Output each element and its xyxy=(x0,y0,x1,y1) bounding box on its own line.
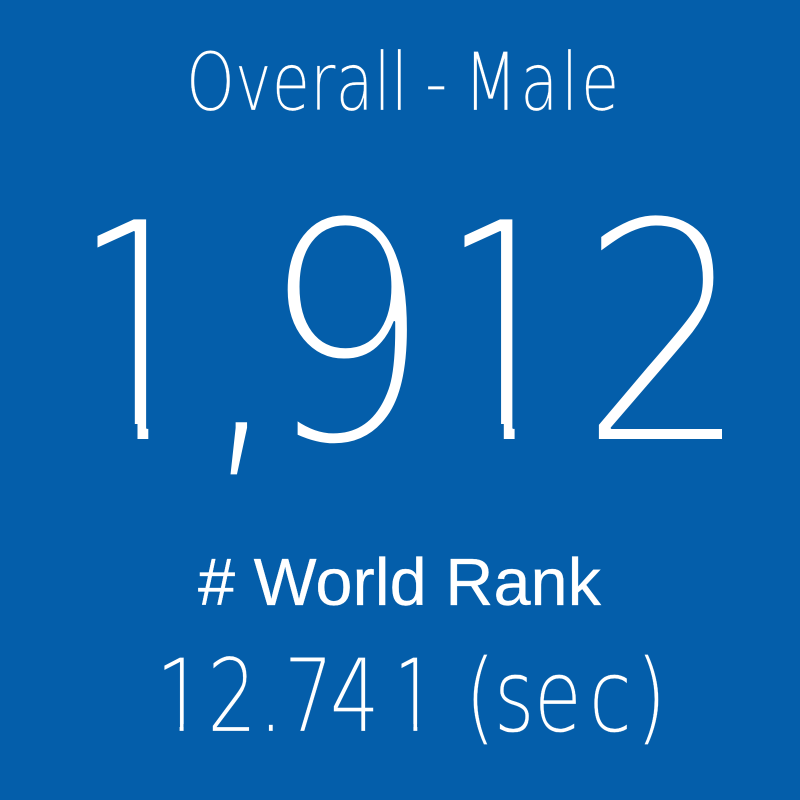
time value: 12.741 (sec) xyxy=(156,638,666,756)
title: Male xyxy=(464,36,622,129)
title: Overall xyxy=(186,36,408,129)
title: - xyxy=(425,36,447,129)
big number: 1,912 xyxy=(51,158,750,512)
label: # World Rank xyxy=(198,546,602,620)
